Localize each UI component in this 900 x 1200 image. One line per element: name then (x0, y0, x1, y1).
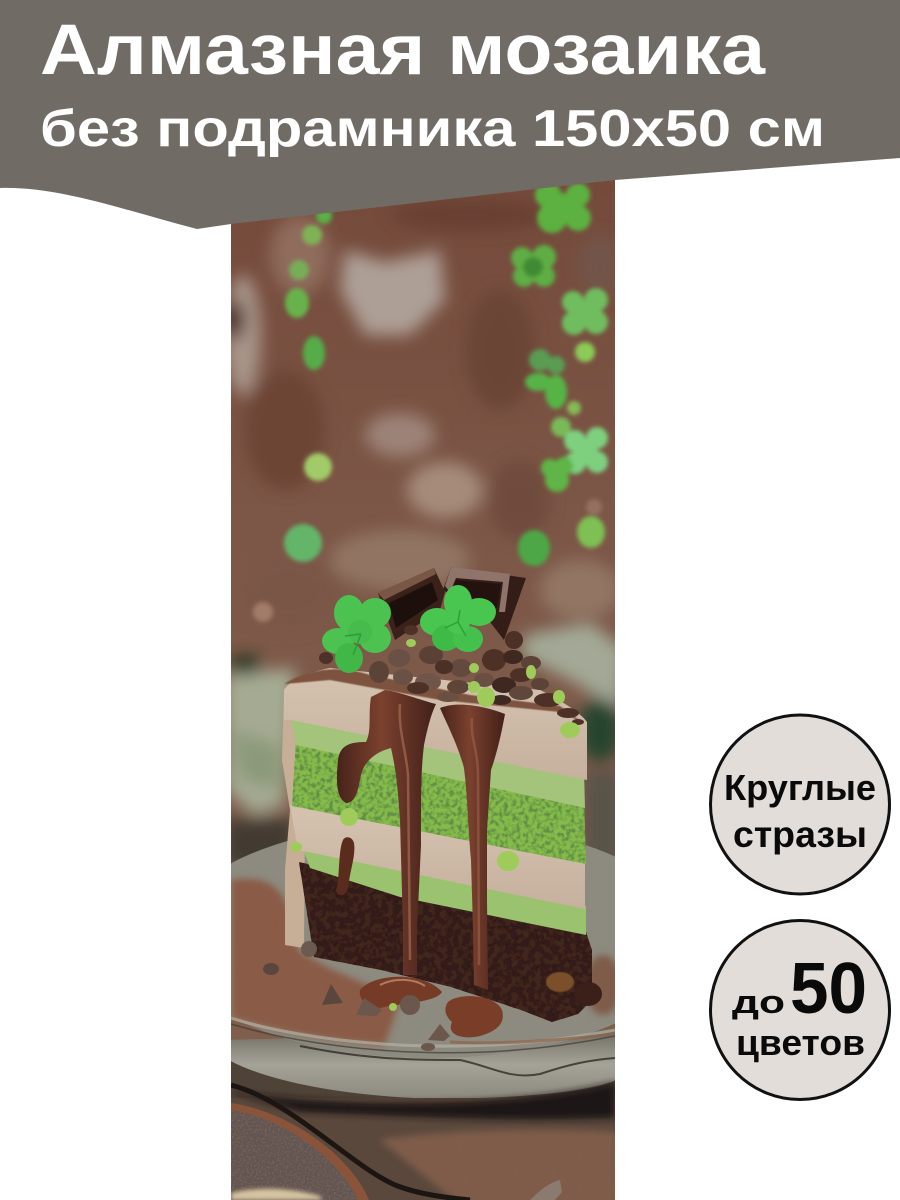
green sponge layer (292, 738, 586, 864)
badge number 50: 50 (790, 949, 867, 1029)
badge: up to 50 colours (710, 920, 890, 1100)
cake side frosting (282, 690, 306, 948)
icon: clover left (322, 595, 391, 673)
plate (231, 841, 615, 1098)
title: Алмазная мозаика (40, 11, 766, 90)
bowl (231, 1103, 369, 1200)
badge text: colours: цветов (736, 1022, 865, 1063)
badge: round rhinestones (710, 715, 890, 894)
panel: photo of cake (231, 180, 615, 1200)
photo background (231, 180, 615, 1040)
table and bowl (231, 1082, 620, 1200)
header banner (0, 0, 900, 229)
chocolate drips (336, 690, 505, 1037)
light green lower band (302, 846, 586, 935)
icon: clover right (420, 585, 496, 652)
lower cream layer (290, 805, 585, 909)
subtitle: без подрамника 150х50 см (40, 100, 825, 158)
light green upper band (291, 718, 585, 808)
dark chocolate base layer (299, 862, 592, 1022)
badge text: up to: до (732, 984, 785, 1020)
badge text line 1: Круглые (724, 767, 876, 808)
badge text line 2: стразы (733, 814, 867, 855)
blurred napkin behind cake (225, 622, 625, 870)
upper cream layer (284, 668, 587, 780)
chocolate chips and crumbs (263, 625, 602, 1051)
background blurred clovers (284, 182, 608, 566)
cake slice (282, 668, 592, 1022)
chocolate squares (378, 567, 526, 640)
pistachio crumbs (290, 639, 580, 1011)
